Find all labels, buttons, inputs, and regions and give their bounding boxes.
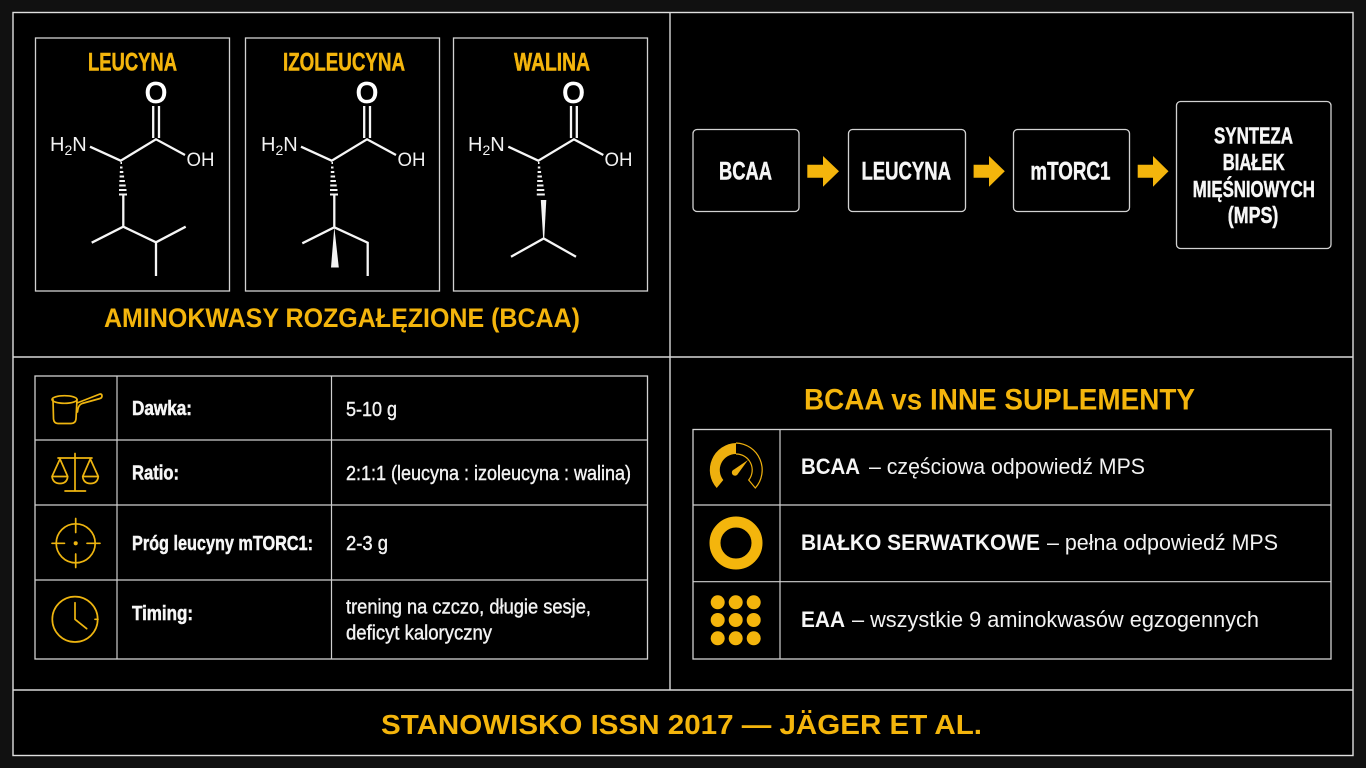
icon: gauge xyxy=(710,443,762,488)
panel: walina xyxy=(454,38,648,291)
row: ratio: Ratio: xyxy=(132,462,179,484)
flow diagram xyxy=(693,102,1331,248)
step: synteza: SYNTEZA xyxy=(1214,122,1293,148)
step: bcaa: BCAA xyxy=(719,158,772,186)
step: mtorc1 xyxy=(1014,130,1130,212)
row: ratio xyxy=(132,462,631,485)
molecule: walina xyxy=(468,78,632,257)
row: dawka xyxy=(132,398,397,421)
molecule: izoleucyna: O xyxy=(356,78,378,110)
molecule: leucyna: OH xyxy=(186,150,214,171)
row: dawka: 5-10 g xyxy=(346,399,397,421)
icon: nine dots xyxy=(711,595,761,645)
heading: walina: WALINA xyxy=(514,48,590,76)
molecule: izoleucyna: 2 xyxy=(275,142,283,158)
row: ratio: 2:1:1 (leucyna : izoleucyna : walina) xyxy=(346,463,631,485)
molecule: walina: OH xyxy=(604,150,632,171)
icon: target xyxy=(52,518,100,568)
row: dawka: Dawka: xyxy=(132,398,192,420)
heading: aminokwasy: AMINOKWASY ROZGAŁĘZIONE (BCAA) xyxy=(104,303,580,333)
molecule: leucyna xyxy=(50,78,214,276)
step: mtorc1: mTORC1 xyxy=(1030,158,1110,186)
row: prog leucyny: Próg leucyny mTORC1: xyxy=(132,533,313,555)
icon: ring xyxy=(715,522,757,564)
molecule: walina: H xyxy=(468,134,482,156)
row: timing: deficyt kaloryczny xyxy=(346,622,492,644)
heading: izoleucyna: IZOLEUCYNA xyxy=(283,48,405,76)
heading: bcaa vs inne suplementy: BCAA vs INNE SUPLEMENTY xyxy=(804,384,1195,416)
molecule: leucyna: 2 xyxy=(64,142,72,158)
row: prog leucyny: 2-3 g xyxy=(346,533,388,555)
footer: source: STANOWISKO ISSN 2017 — JÄGER ET AL. xyxy=(381,709,982,740)
molecule: walina: N xyxy=(490,134,505,156)
step: synteza xyxy=(1176,102,1331,248)
row: eaa: EAA xyxy=(801,607,845,632)
arrow 2 xyxy=(974,156,1005,187)
icon: clock xyxy=(52,597,98,642)
row: bialko serwatkowe: – pełna odpowiedź MPS xyxy=(1047,530,1278,555)
molecule: izoleucyna: OH xyxy=(398,150,426,171)
heading: leucyna: LEUCYNA xyxy=(88,48,177,76)
molecule: izoleucyna: H xyxy=(261,134,275,156)
step: synteza: BIAŁEK xyxy=(1223,149,1285,175)
arrow 3 xyxy=(1138,156,1168,187)
step: leucyna xyxy=(848,130,966,212)
icon: scales xyxy=(52,454,98,491)
row: bcaa: BCAA xyxy=(801,454,860,479)
molecule: leucyna: O xyxy=(145,78,167,110)
row: timing: trening na czczo, długie sesje, xyxy=(346,596,591,618)
icon: scoop xyxy=(52,394,102,424)
step: leucyna: LEUCYNA xyxy=(862,158,951,186)
panel: izoleucyna xyxy=(246,38,440,291)
step: synteza: (MPS) xyxy=(1228,202,1278,228)
arrow 1 xyxy=(807,156,839,187)
row: eaa: – wszystkie 9 aminokwasów egzogennych xyxy=(852,607,1259,632)
row: timing: Timing: xyxy=(132,603,193,625)
table: porownanie xyxy=(693,430,1331,659)
panel: leucyna xyxy=(36,38,230,291)
molecule: leucyna: H xyxy=(50,134,64,156)
step: synteza: MIĘŚNIOWYCH xyxy=(1193,175,1315,202)
row: bialko serwatkowe xyxy=(801,530,1278,555)
molecule: walina: 2 xyxy=(482,142,490,158)
row: bcaa: – częściowa odpowiedź MPS xyxy=(869,454,1145,479)
step: bcaa xyxy=(693,130,799,212)
table: dawkowanie xyxy=(35,376,648,659)
row: bialko serwatkowe: BIAŁKO SERWATKOWE xyxy=(801,530,1040,555)
molecule: izoleucyna xyxy=(261,78,426,276)
molecule: walina: O xyxy=(562,78,584,110)
row: timing xyxy=(132,596,591,644)
molecule: leucyna: N xyxy=(72,134,87,156)
molecule: izoleucyna: N xyxy=(283,134,298,156)
